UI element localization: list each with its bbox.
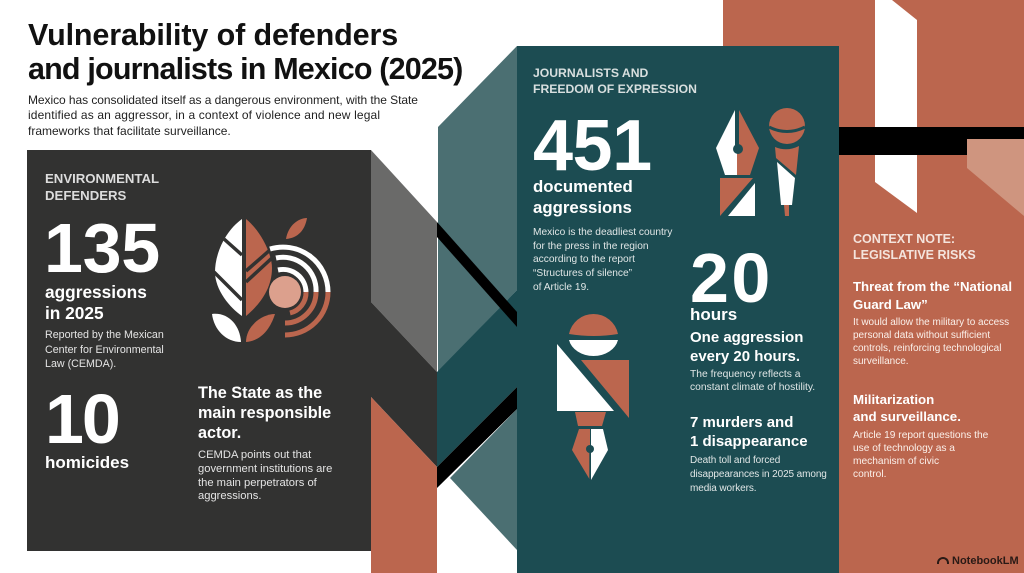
text: deadliest country: for the press in the region <box>533 241 649 252</box>
heading: militarization <box>853 392 961 424</box>
text: death toll: media workers. <box>690 483 756 494</box>
text: militarization: control. <box>853 469 886 480</box>
intro text: Mexico has consolidated itself as a dangerous environment, with the State <box>28 92 418 106</box>
label: aggressions in 2025: aggressions <box>45 282 147 302</box>
heading: threat: Guard Law” <box>853 296 928 312</box>
text: CEMDA: the main perpetrators of <box>198 477 317 489</box>
stat: 10 homicides: 10 <box>45 380 119 458</box>
text: death toll: disappearances in 2025 among <box>690 469 827 480</box>
intro text: identified as an aggressor, in a context of violence and new legal <box>28 108 380 122</box>
text: threat <box>853 317 1009 367</box>
text: death toll: Death toll and forced <box>690 455 780 466</box>
heading: militarization: Militarization <box>853 392 934 407</box>
label: documented aggressions: documented <box>533 177 633 196</box>
text: CEMDA: CEMDA points out that <box>198 449 311 461</box>
text: frequency <box>690 368 815 393</box>
source note <box>45 329 164 370</box>
text: militarization <box>853 430 988 480</box>
heading: threat <box>853 279 1012 312</box>
heading: threat: Threat from the “National <box>853 279 1012 294</box>
text: deadliest country: “Structures of silence” <box>533 268 632 279</box>
text: frequency: The frequency reflects a <box>690 368 800 380</box>
source note: Reported by the Mexican <box>45 329 164 341</box>
heading: context note: LEGISLATIVE RISKS <box>853 248 976 262</box>
label: documented aggressions: aggressions <box>533 198 632 216</box>
heading: one aggression every 20 hours: every 20 hours. <box>690 348 800 364</box>
stat: 20: 20 <box>690 239 773 317</box>
panel: environmental defenders <box>44 171 332 502</box>
heading: context note: CONTEXT NOTE: <box>853 232 955 246</box>
heading: 7 murders: 7 murders and <box>690 414 793 431</box>
heading: journalists <box>533 66 697 96</box>
text: militarization: mechanism of civic <box>853 456 939 467</box>
text: deadliest country <box>533 227 672 293</box>
heading: environmental defenders: DEFENDERS <box>45 188 126 203</box>
panel: context note <box>853 232 1012 480</box>
heading: the state as main responsible actor: main responsible <box>198 404 331 422</box>
text: CEMDA: government institutions are <box>198 463 332 475</box>
heading: journalists: JOURNALISTS AND <box>533 66 648 80</box>
text: militarization: Article 19 report questions the <box>853 430 988 440</box>
text: CEMDA <box>198 449 332 502</box>
heading: militarization: and surveillance. <box>853 409 961 424</box>
title: Vulnerability of defenders <box>28 18 398 52</box>
label: homicides: homicides <box>45 453 129 472</box>
source note: Law (CEMDA). <box>45 358 116 370</box>
text: threat: It would allow the military to access <box>853 317 1009 328</box>
heading: journalists: FREEDOM OF EXPRESSION <box>533 82 697 96</box>
text: frequency: constant climate of hostility. <box>690 382 815 393</box>
text: deadliest country: according to the report <box>533 254 635 265</box>
panel: journalists and freedom of expression <box>533 66 827 494</box>
text: deadliest country: of Article 19. <box>533 282 589 293</box>
title <box>28 18 462 86</box>
text: deadliest country: Mexico is the deadliest country <box>533 227 672 238</box>
heading: context note <box>853 232 976 262</box>
heading: environmental defenders <box>45 171 159 203</box>
heading: the state as main responsible actor: The State as the <box>198 384 322 402</box>
text: death toll <box>690 455 827 494</box>
heading: 7 murders: 1 disappearance <box>690 432 808 450</box>
text: threat: controls, reinforcing technological <box>853 343 1001 354</box>
intro text: frameworks that facilitate surveillance. <box>28 124 231 138</box>
text: threat: personal data without sufficient <box>853 330 990 341</box>
title: and journalists in Mexico (2025) <box>28 52 462 86</box>
text: militarization: use of technology as a <box>853 443 955 454</box>
text: CEMDA: aggressions. <box>198 490 261 502</box>
heading: the state as main responsible actor <box>198 384 331 442</box>
text: threat: surveillance. <box>853 356 909 367</box>
label: aggressions in 2025: in 2025 <box>45 302 104 322</box>
logo: NotebookLM: NotebookLM <box>952 555 1019 567</box>
heading: one aggression every 20 hours: One aggression <box>690 329 803 346</box>
heading: environmental defenders: ENVIRONMENTAL <box>45 171 159 186</box>
heading: the state as main responsible actor: actor. <box>198 424 241 442</box>
label: hours: hours <box>690 305 737 324</box>
label: aggressions in 2025 <box>45 282 147 322</box>
heading: one aggression every 20 hours <box>690 329 803 364</box>
intro text <box>28 92 418 138</box>
source note: Center for Environmental <box>45 344 164 356</box>
heading: 7 murders <box>690 414 808 450</box>
stat: 135 aggressions: 135 <box>44 209 160 287</box>
label: documented aggressions <box>533 177 633 216</box>
stat: 451: 451 <box>533 106 652 186</box>
